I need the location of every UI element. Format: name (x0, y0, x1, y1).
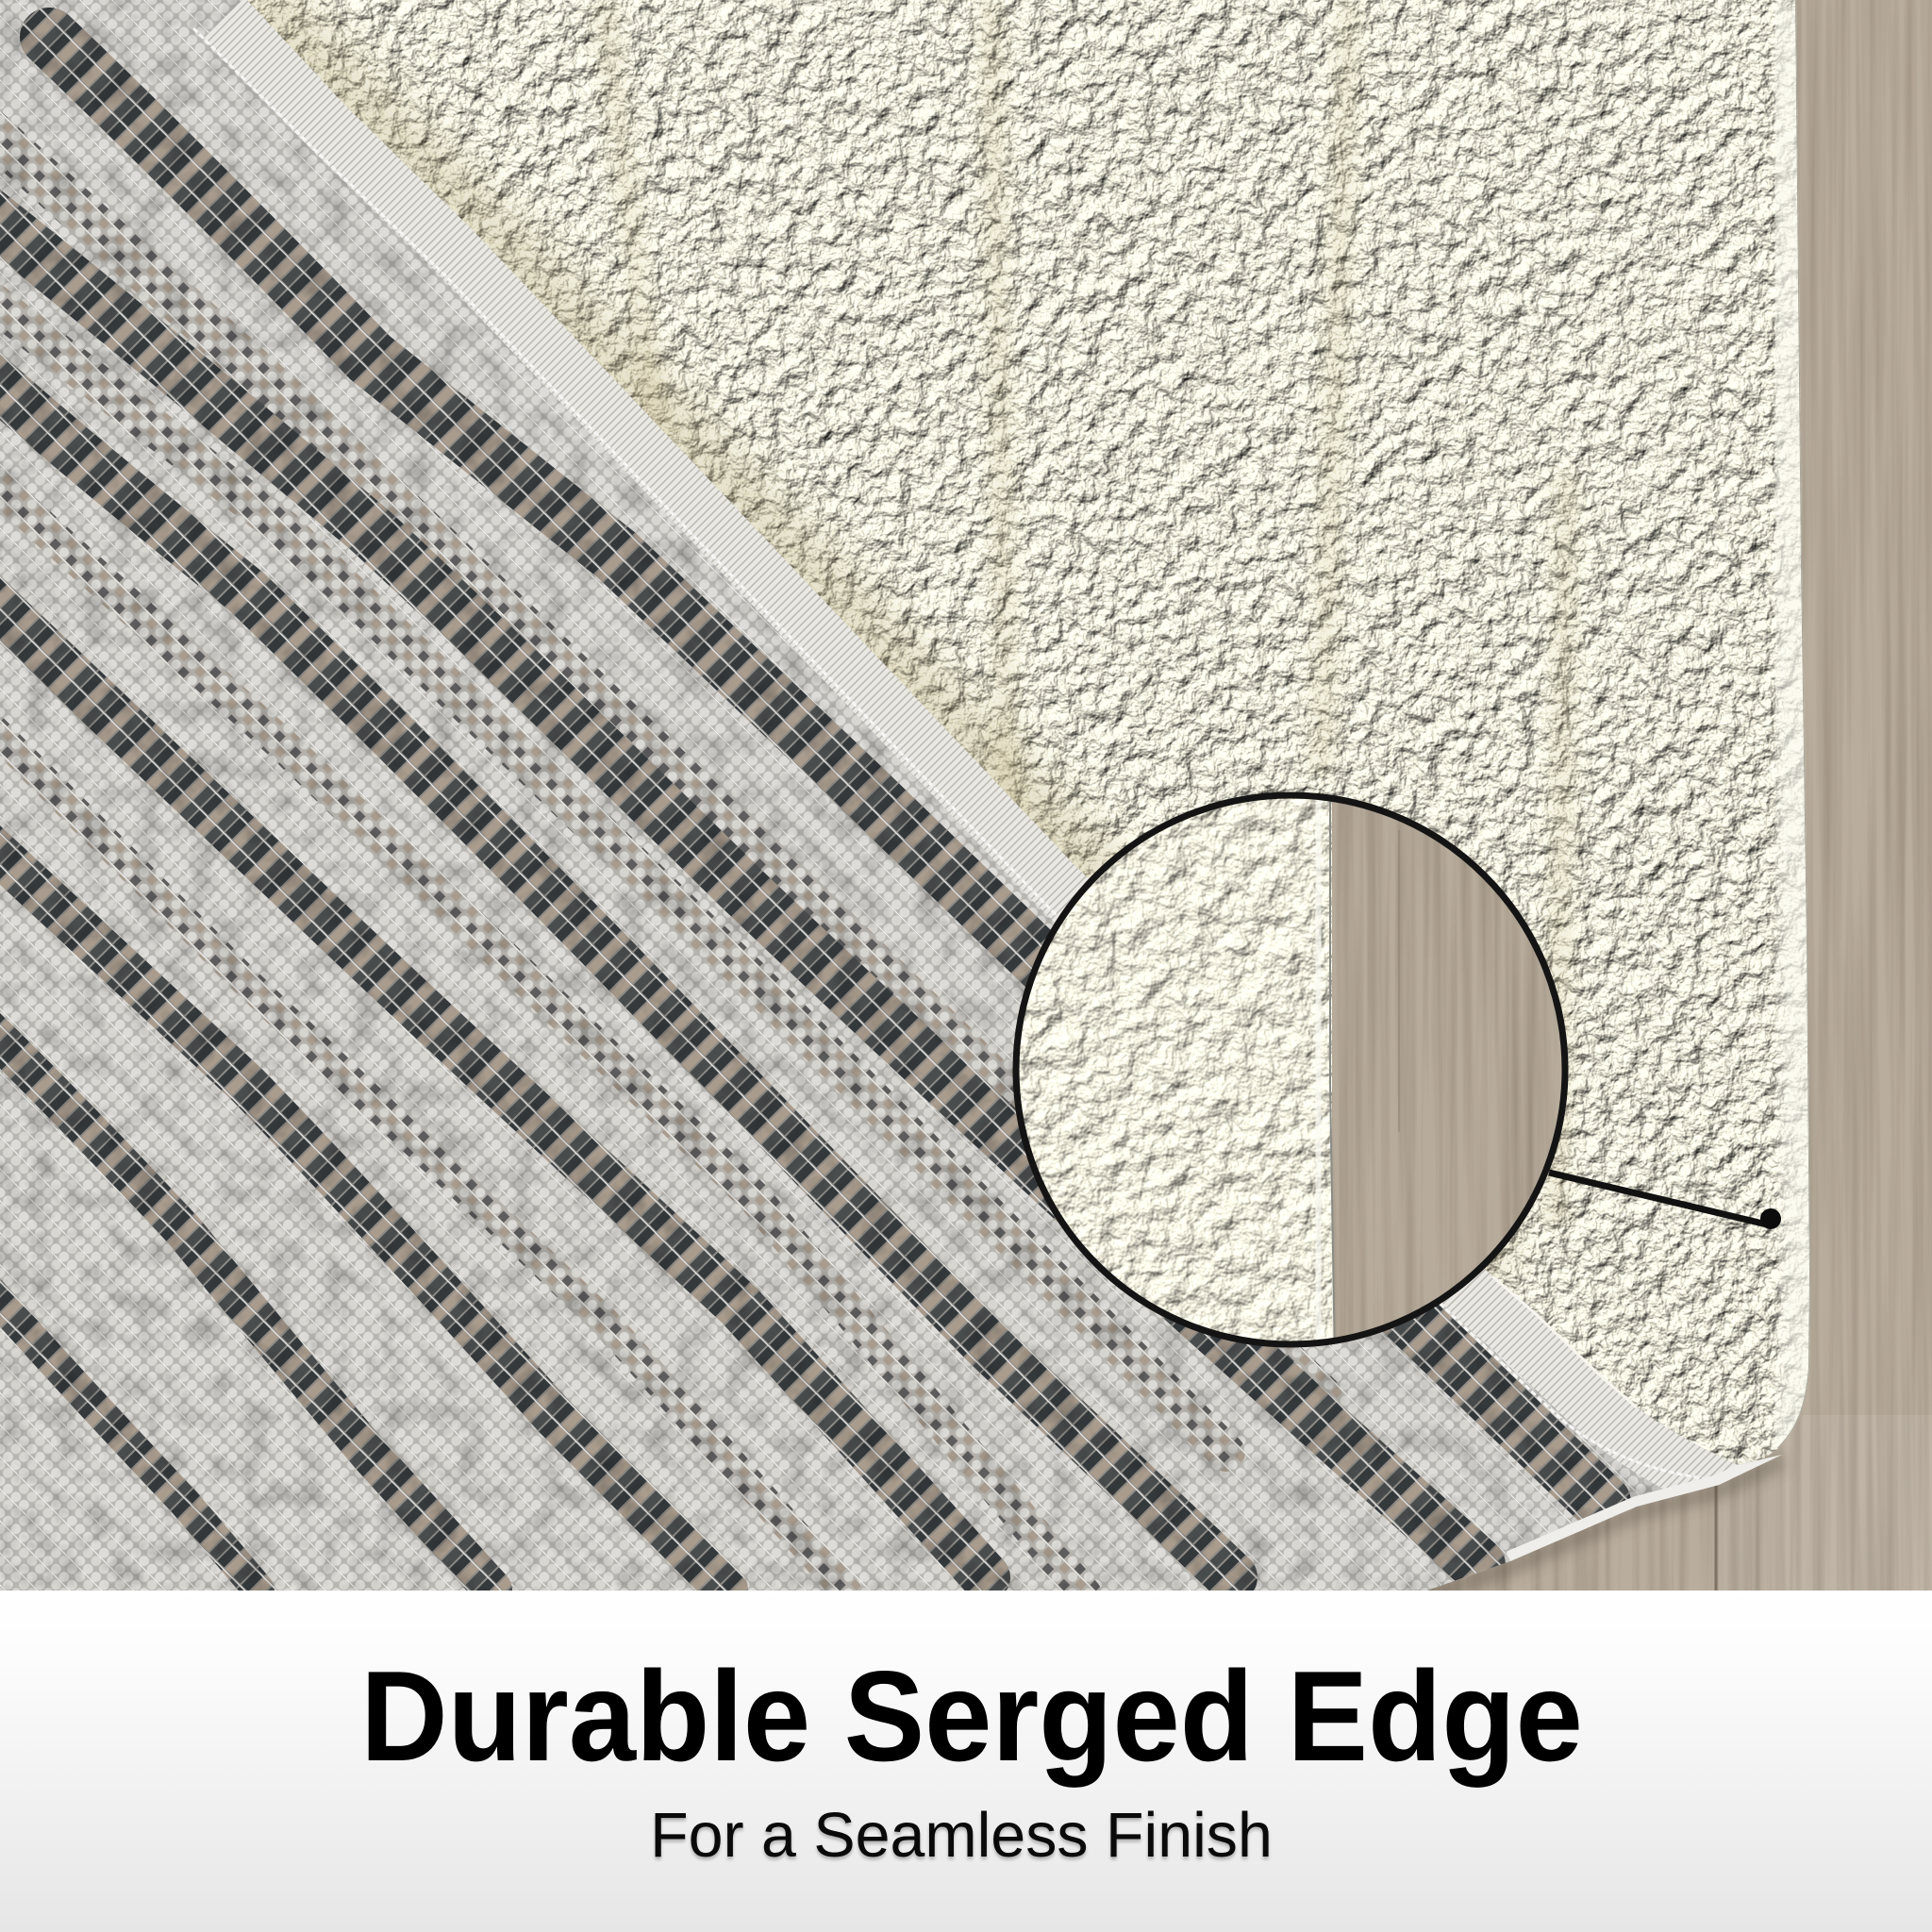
leader dot (1760, 1208, 1781, 1229)
dark woven stripes (0, 37, 1602, 1594)
subtitle: For a Seamless Finish (650, 1801, 1273, 1871)
mottling (0, 0, 1792, 1594)
magnified detail circle (1009, 788, 1575, 1363)
fold highlight at corner (1492, 1276, 1637, 1407)
callout leader line (1549, 1173, 1781, 1229)
bottom caption panel (0, 1591, 1932, 1932)
rug underside weave (0, 0, 1792, 1594)
title: Durable Serged Edge (360, 1643, 1583, 1788)
cream shag rug face (189, 0, 1849, 1509)
shadow under folded corner (1416, 1460, 1782, 1600)
serged edge band (242, 0, 1738, 1465)
